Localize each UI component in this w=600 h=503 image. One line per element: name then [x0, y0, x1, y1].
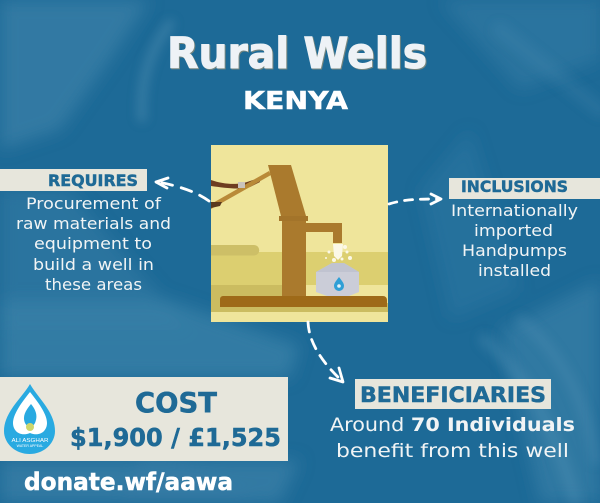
text: beneficiaries description: Around 70 Individuals — [330, 414, 575, 436]
arrow: to requires — [156, 178, 209, 201]
text: beneficiaries description — [330, 414, 575, 462]
text: requires description: these areas — [45, 275, 142, 294]
text: requires description: raw materials and — [16, 214, 171, 233]
label: requires: REQUIRES — [48, 171, 138, 190]
text: inclusions description — [451, 201, 578, 280]
arrow: to inclusions — [389, 194, 441, 204]
label: inclusions — [449, 177, 600, 199]
label: beneficiaries: BENEFICIARIES — [360, 383, 546, 407]
text: inclusions description: imported — [474, 221, 553, 240]
text: inclusions description: installed — [478, 261, 551, 280]
text: donate url: donate.wf/aawa — [24, 468, 233, 496]
panel: cost — [0, 377, 288, 461]
title: Rural Wells — [167, 29, 427, 79]
text: requires description: equipment to — [34, 234, 152, 253]
text: requires description: Procurement of — [26, 194, 161, 213]
text: requires description — [16, 194, 171, 294]
text: inclusions description: Internationally — [451, 201, 578, 220]
icon: Ali Asghar Water Appeal logo — [4, 384, 55, 454]
icon: water container — [316, 263, 359, 296]
icon: flowing water — [325, 244, 352, 262]
text: inclusions description: Handpumps — [462, 241, 567, 260]
subtitle: country: KENYA — [243, 86, 349, 115]
label: inclusions: INCLUSIONS — [461, 177, 568, 196]
text: beneficiaries description: benefit from this well — [336, 440, 569, 462]
label: requires — [0, 169, 147, 191]
icon: Ali Asghar Water Appeal logo: ALI ASGHAR — [12, 438, 49, 444]
icon: pump body and spout — [268, 165, 342, 297]
icon: platform — [220, 296, 387, 307]
icon: pump handle and arms — [211, 171, 271, 209]
text: requires description: build a well in — [33, 255, 154, 274]
text: price: $1,900 / £1,525 — [70, 423, 281, 452]
heading: cost: COST — [135, 386, 217, 419]
illustration: hand pump panel — [211, 145, 388, 322]
icon: Ali Asghar Water Appeal logo: WATER APPEAL — [17, 444, 43, 448]
arrow: to beneficiaries — [308, 322, 343, 382]
